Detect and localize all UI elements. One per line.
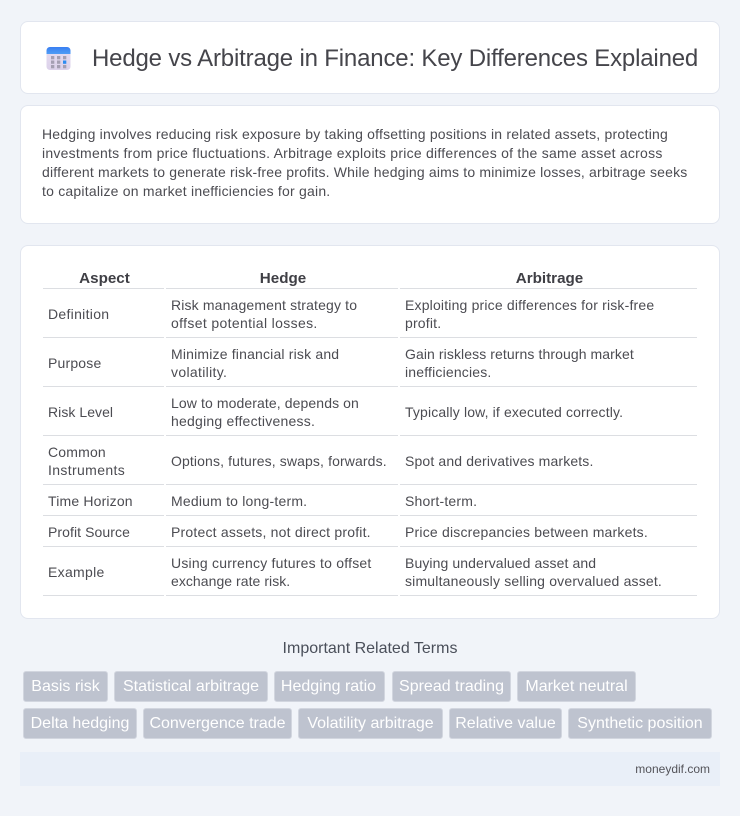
row: risk level: Typically low, if executed correctly.	[405, 404, 623, 420]
row: common instruments: Instruments	[48, 462, 125, 478]
related terms tags	[23, 671, 712, 739]
row: risk level: Low to moderate, depends on	[171, 395, 359, 411]
related terms tags: Convergence trade	[149, 715, 286, 732]
row: example: Using currency futures to offset	[171, 555, 372, 571]
row: example: exchange rate risk.	[171, 573, 290, 589]
related terms tags: Statistical arbitrage	[123, 678, 259, 695]
row: definition: Exploiting price differences for risk-free	[405, 297, 654, 313]
intro line 3: different markets to generate risk-free profits. While hedging aims to minimize losses, arbitrage seeks	[42, 164, 687, 180]
related terms tags: Market neutral	[525, 678, 628, 695]
row: time horizon	[48, 493, 477, 509]
panel: comparison table	[20, 245, 720, 619]
row: example	[48, 555, 662, 589]
row: purpose: volatility.	[171, 364, 227, 380]
row: common instruments: Spot and derivatives markets.	[405, 453, 593, 469]
row: purpose	[48, 346, 634, 380]
row: definition: Definition	[48, 306, 109, 322]
row: profit source: Price discrepancies between markets.	[405, 524, 648, 540]
intro line 4: to capitalize on market inefficiencies for gain.	[42, 183, 330, 199]
row: purpose: Gain riskless returns through market	[405, 346, 634, 362]
row: example: simultaneously selling overvalued asset.	[405, 573, 662, 589]
related terms tags: Relative value	[455, 715, 556, 732]
row: risk level: Risk Level	[48, 404, 113, 420]
row: definition: Risk management strategy to	[171, 297, 357, 313]
row: common instruments	[48, 444, 593, 478]
related terms tags: Basis risk	[31, 678, 100, 695]
footer bar	[20, 752, 720, 786]
related terms tags: Volatility arbitrage	[307, 715, 434, 732]
row: profit source	[48, 524, 648, 540]
title: Hedge vs Arbitrage in Finance: Key Differences Explained	[92, 45, 698, 72]
table header	[79, 270, 583, 287]
related terms tags: Synthetic position	[577, 715, 703, 732]
icon: calendar	[46, 47, 70, 70]
related terms heading: Important Related Terms	[283, 640, 457, 657]
table header: Aspect	[79, 270, 130, 287]
row: risk level	[48, 395, 623, 429]
row: example: Example	[48, 564, 105, 580]
row: time horizon: Medium to long-term.	[171, 493, 307, 509]
intro line 2: investments from price fluctuations. Arbitrage exploits price differences of the same asset across	[42, 145, 663, 161]
header panel	[20, 21, 720, 94]
row: purpose: Minimize financial risk and	[171, 346, 339, 362]
table header: Hedge	[260, 270, 306, 287]
table header: Arbitrage	[516, 270, 583, 287]
related terms tags: Delta hedging	[31, 715, 129, 732]
related terms tags: Hedging ratio	[281, 678, 376, 695]
row: profit source: Protect assets, not direct profit.	[171, 524, 371, 540]
row: risk level: hedging effectiveness.	[171, 413, 315, 429]
row: common instruments: Common	[48, 444, 106, 460]
intro line 1: Hedging involves reducing risk exposure by taking offsetting positions in related assets, protecting	[42, 126, 668, 142]
row: definition: profit.	[405, 315, 441, 331]
row: definition	[48, 297, 654, 331]
related terms tags: Spread trading	[399, 678, 504, 695]
row: time horizon: Time Horizon	[48, 493, 133, 509]
row: profit source: Profit Source	[48, 524, 130, 540]
row: example: Buying undervalued asset and	[405, 555, 596, 571]
footer source: moneydif.com	[635, 762, 710, 776]
row: definition: offset potential losses.	[171, 315, 318, 331]
panel: intro text	[20, 105, 720, 224]
row: time horizon: Short-term.	[405, 493, 477, 509]
row: purpose: Purpose	[48, 355, 101, 371]
row: common instruments: Options, futures, swaps, forwards.	[171, 453, 387, 469]
row: purpose: inefficiencies.	[405, 364, 492, 380]
